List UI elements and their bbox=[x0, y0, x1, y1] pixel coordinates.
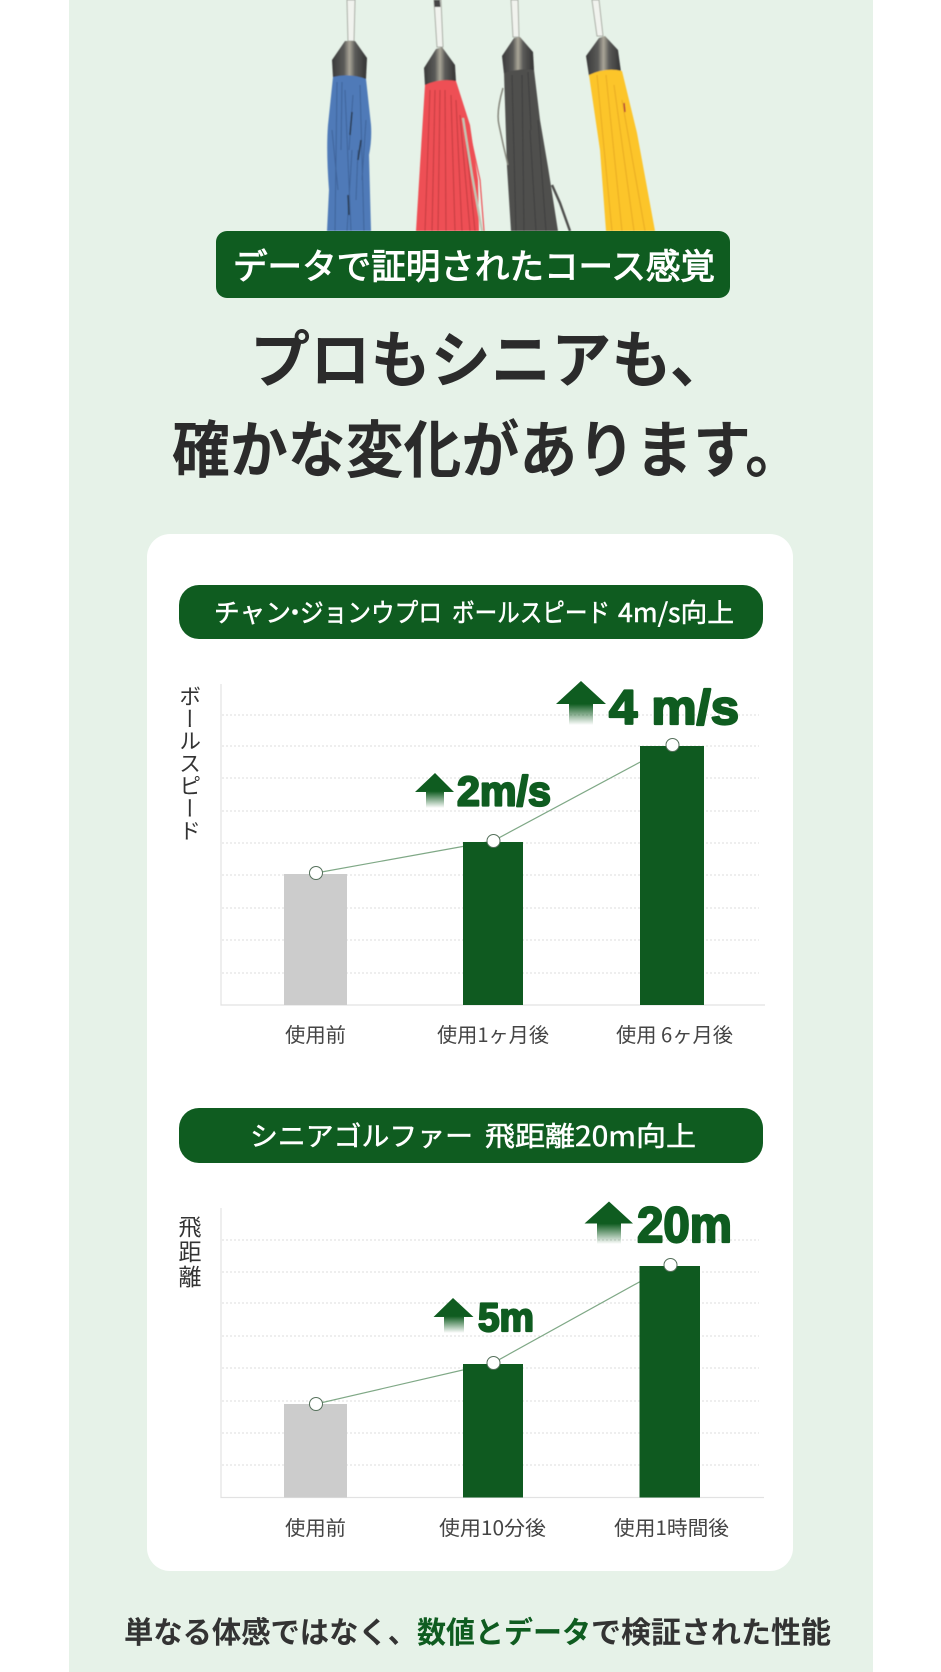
heading: chart 2 pill bbox=[179, 1108, 763, 1163]
category labels: 使用 6ヶ月後 bbox=[616, 1019, 733, 1048]
tassel: red bbox=[416, 0, 484, 231]
bar: after 10 minutes bbox=[463, 1364, 523, 1498]
panel: white card bbox=[147, 534, 793, 1571]
arrow: up small bbox=[434, 1298, 474, 1333]
heading: chart 1 pill: ・ bbox=[283, 593, 307, 628]
footer statement bbox=[124, 1608, 831, 1652]
heading: chart 1 pill bbox=[179, 585, 763, 639]
value: 5m: 5m bbox=[478, 1296, 534, 1340]
value: 20m: 20m bbox=[637, 1197, 732, 1253]
bar: after 1 hour bbox=[640, 1266, 700, 1498]
heading: chart 1 pill: 4m/s向上 bbox=[618, 593, 734, 630]
bar: after 6 months bbox=[640, 746, 704, 1005]
data points bbox=[310, 1258, 677, 1410]
tassel: blue bbox=[327, 0, 371, 231]
category labels bbox=[285, 1512, 729, 1541]
tassel: black bbox=[498, 0, 570, 231]
heading: chart 1 pill: チャン bbox=[214, 593, 291, 630]
y axis label: ボールスピード bbox=[174, 685, 206, 842]
tassel: yellow bbox=[586, 0, 655, 231]
category labels: 使用1時間後 bbox=[614, 1512, 729, 1541]
arrow: up large bbox=[556, 681, 606, 725]
value: 4 m/s: 4 m/s bbox=[609, 682, 739, 735]
footer statement: 数値とデータ bbox=[417, 1608, 591, 1652]
data points bbox=[310, 738, 679, 880]
chart: ball speed bbox=[174, 681, 765, 1048]
heading: chart 1 pill: ジョンウプロ bbox=[300, 593, 442, 630]
category labels: 使用前 bbox=[285, 1512, 346, 1541]
chart: carry distance bbox=[173, 1197, 764, 1541]
title bbox=[172, 310, 803, 490]
category labels bbox=[285, 1019, 733, 1048]
bar: before bbox=[284, 1404, 347, 1498]
arrow: up large bbox=[584, 1202, 633, 1244]
value: 2m/s: 2m/s bbox=[457, 768, 551, 814]
arrow: up small bbox=[415, 773, 454, 808]
title: プロもシニアも、 bbox=[250, 310, 730, 400]
heading: chart 2 pill: シニアゴルファー bbox=[250, 1115, 473, 1154]
bar: before bbox=[284, 874, 347, 1005]
heading: chart 2 pill: 飛距離20m向上 bbox=[485, 1115, 696, 1154]
heading: chart 1 pill: ボールスピード bbox=[452, 593, 610, 630]
trend line bbox=[316, 745, 672, 873]
y axis label: 飛距離 bbox=[173, 1215, 207, 1290]
trend line bbox=[316, 1265, 670, 1404]
category labels: 使用10分後 bbox=[439, 1512, 546, 1541]
tag: data proven: データで証明されたコース感覚 bbox=[233, 239, 715, 290]
footer statement: 単なる体感ではなく、 bbox=[124, 1608, 417, 1652]
category labels: 使用前 bbox=[285, 1019, 346, 1048]
tassel image group bbox=[327, 0, 655, 231]
footer statement: で検証された性能 bbox=[591, 1608, 831, 1652]
bar: after 1 month bbox=[463, 842, 523, 1005]
category labels: 使用1ヶ月後 bbox=[437, 1019, 549, 1048]
title: 確かな変化があります。 bbox=[172, 400, 803, 490]
